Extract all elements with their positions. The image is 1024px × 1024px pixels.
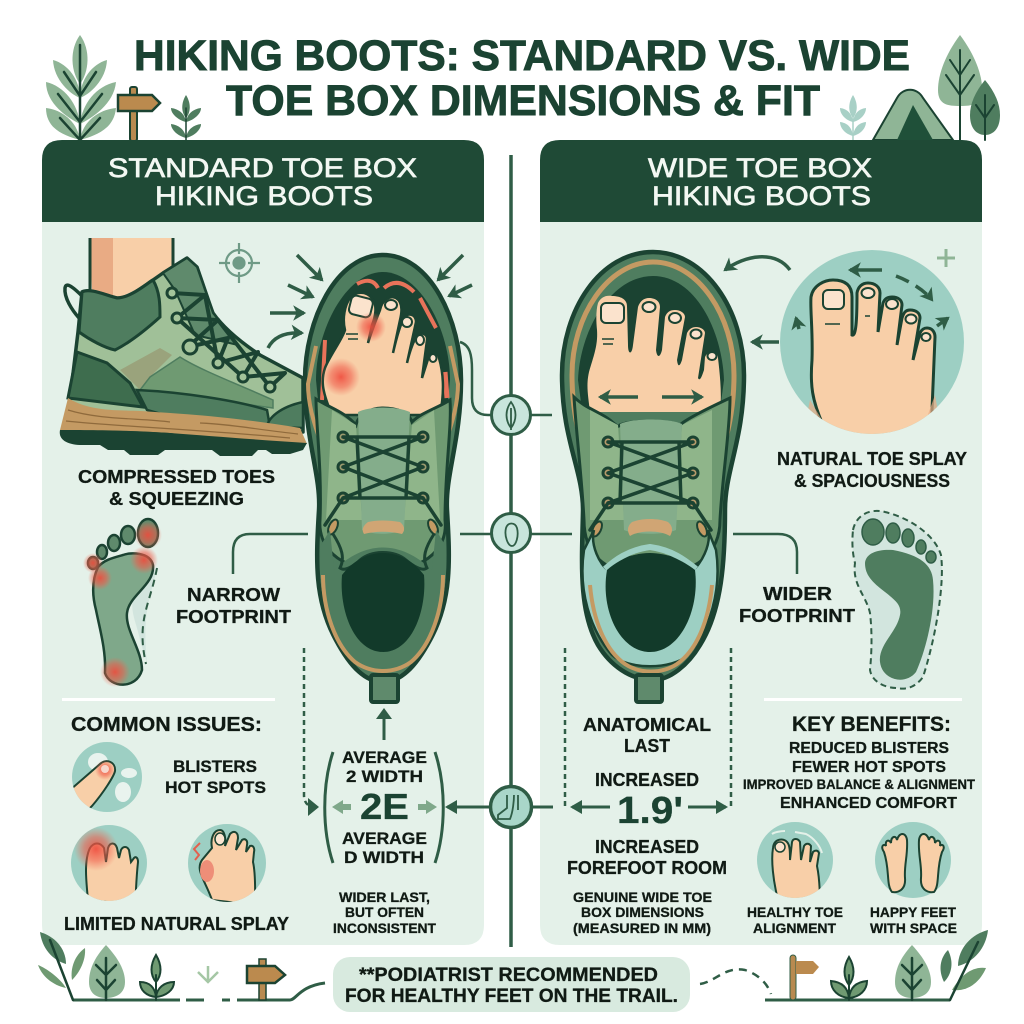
heel tab wide [636,675,662,702]
list: key benefits: REDUCED BLISTERS [789,740,949,757]
boot outsole [60,430,307,456]
label: toe splay [777,449,967,491]
icon: target [219,243,260,283]
connector: wide footprint [733,534,797,574]
boot upper [66,258,303,432]
icon: toe splay circle [780,249,964,450]
upper and laces [316,399,450,570]
width callout: 2E: AVERAGE [342,829,427,848]
labels: benefits icons: HAPPY FEET [870,904,956,920]
note: wider last [333,889,436,936]
boot pull loop [65,285,82,318]
label: increased forefoot room [567,837,727,878]
connector nodes [445,342,572,828]
footer decoration: right [700,930,988,1000]
label: compressed toes [78,467,275,509]
heel collar wide [582,530,718,672]
footer note [333,957,690,1012]
foot in narrow boot [323,293,443,415]
footer note: **PODIATRIST RECOMMENDED [359,965,658,986]
decoration: top left plants and sign [46,35,201,141]
label: toe splay: NATURAL TOE SPLAY [777,449,967,469]
dimension text: anatomical last: LAST [624,736,670,756]
toe cavity [316,272,450,410]
center divider [509,155,513,947]
panel header: wide [540,140,982,222]
title: TOE BOX DIMENSIONS & FIT [226,77,820,125]
illustration: narrow footprint [83,519,162,687]
label: increased forefoot room: INCREASED [595,837,699,857]
list: key benefits: ENHANCED COMFORT [780,795,957,812]
footer note: FOR HEALTHY FEET ON THE TRAIL. [345,986,678,1007]
width callout: 2E [304,648,443,867]
label: narrow footprint: NARROW [187,585,280,605]
note: genuine wide: GENUINE WIDE TOE [573,889,712,905]
title [134,32,910,125]
toe cavity wide [578,276,724,410]
label: increased forefoot room: FOREFOOT ROOM [567,858,727,878]
panel header: standard: STANDARD TOE BOX [108,153,417,183]
note: genuine wide: BOX DIMENSIONS [581,904,704,920]
labels: benefits icons: WITH SPACE [870,920,957,936]
panel header: wide: WIDE TOE BOX [648,153,872,183]
note: genuine wide [573,889,712,936]
list: key benefits: FEWER HOT SPOTS [792,759,946,776]
icon: bunion foot [188,824,266,905]
width callout: 2E: 2 WIDTH [346,767,423,786]
labels: benefits icons: ALIGNMENT [753,920,836,936]
label: toe splay: & SPACIOUSNESS [794,471,950,491]
foot in wide boot [587,296,721,412]
illustration: wider footprint [852,511,942,689]
panel header: standard: HIKING BOOTS [155,181,373,211]
illustration: standard boot top view [305,255,461,702]
label: narrow footprint [176,585,291,627]
icon: red toe [71,825,147,905]
heel collar [320,530,446,671]
panel header: wide: HIKING BOOTS [652,181,871,211]
list: key benefits: IMPROVED BALANCE & ALIGNMENT [743,776,975,792]
icon: healthy toe alignment [757,822,833,905]
list: key benefits [743,698,975,812]
width callout: 2E: 2E [360,786,409,827]
icon: happy feet [875,822,951,898]
note: wider last: INCONSISTENT [333,920,436,936]
panel: standard toe box [42,140,484,945]
dimension text: anatomical last: ANATOMICAL [583,715,711,735]
label: wider footprint [739,584,855,626]
label: compressed toes: & SQUEEZING [109,489,244,509]
title: HIKING BOOTS: STANDARD VS. WIDE [134,32,910,80]
labels: benefits icons [747,904,957,936]
footer decoration: left [38,932,325,1000]
dimension text: anatomical last: INCREASED [595,770,699,790]
panel: wide toe box [540,140,982,945]
connector: footprint [233,534,308,574]
boot midsole [60,398,307,444]
label: blisters hot spots: HOT SPOTS [165,778,266,797]
note: wider last: BUT OFTEN [345,904,424,920]
panel header: standard [42,140,484,222]
list: key benefits: KEY BENEFITS: [792,713,951,736]
icon: blister finger [72,742,142,812]
labels: benefits icons: HEALTHY TOE [747,904,843,920]
label: blisters hot spots [165,757,266,797]
heading: common issues [62,698,275,736]
boot laces [172,293,285,387]
width callout: 2E: D WIDTH [344,848,424,867]
dimension text: anatomical last [583,715,711,790]
label: blisters hot spots: BLISTERS [173,757,257,776]
label: wider footprint: FOOTPRINT [739,606,855,626]
note: wider last: WIDER LAST, [339,889,430,905]
arrows: compression [268,255,472,348]
width callout: 1.9: 1.9' [617,790,683,832]
label: compressed toes: COMPRESSED TOES [78,467,275,487]
width callout: 1.9 [565,648,731,832]
heel tab [371,675,398,702]
label: limited natural splay: LIMITED NATURAL SPLAY [64,914,289,934]
note: genuine wide: (MEASURED IN MM) [573,920,711,936]
illustration: wide boot top view [562,252,744,702]
label: narrow footprint: FOOTPRINT [176,607,291,627]
arrows: toward shoe [725,257,790,342]
width callout: 2E: AVERAGE [342,748,427,767]
decoration: top right tent and trees [840,35,1000,140]
upper and laces wide [574,397,730,575]
illustration: side view boot [60,238,307,456]
label: wider footprint: WIDER [763,584,832,604]
heading: common issues: COMMON ISSUES: [71,714,262,736]
